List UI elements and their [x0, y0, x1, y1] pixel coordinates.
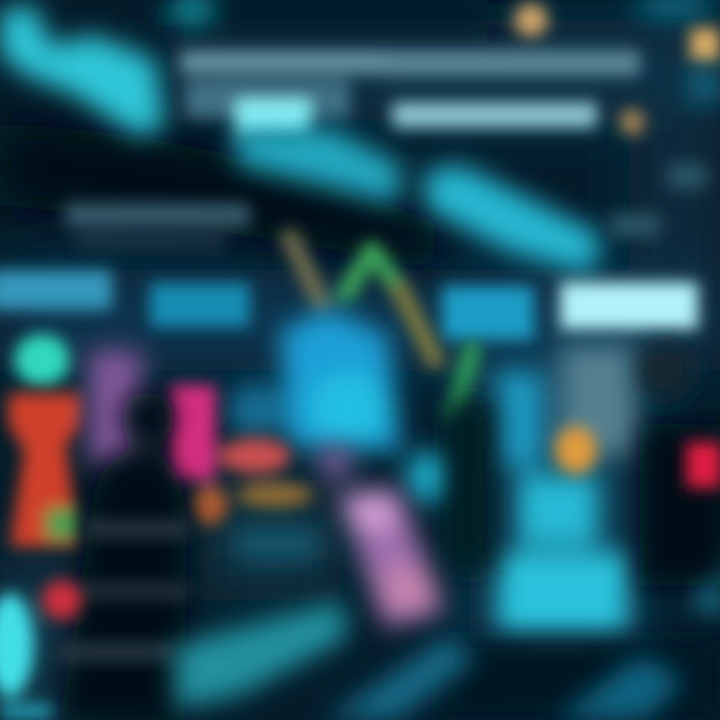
mid-left grey text bands — [65, 163, 706, 249]
header text bands — [180, 50, 640, 136]
right cyan columns — [495, 345, 720, 634]
central cyan block — [227, 308, 458, 503]
blue label bands — [0, 270, 698, 340]
orange and red indicators — [555, 426, 720, 488]
seated silhouette — [60, 392, 185, 720]
pink and lilac candlestick — [317, 446, 445, 628]
bottom-left cyan and red — [0, 580, 82, 720]
dark sweeping arc — [0, 0, 500, 270]
lower cyan streaks — [175, 528, 685, 720]
purple and pink columns — [88, 350, 142, 465]
dark figure on right — [440, 342, 720, 720]
line chart strokes — [290, 238, 472, 412]
teal blob — [14, 334, 70, 386]
silhouette stripes — [58, 520, 190, 661]
top-left cyan streak — [0, 0, 717, 135]
cyan diagonal bands — [232, 70, 720, 275]
orange accent spots — [514, 3, 720, 135]
red candlestick block — [8, 393, 82, 547]
